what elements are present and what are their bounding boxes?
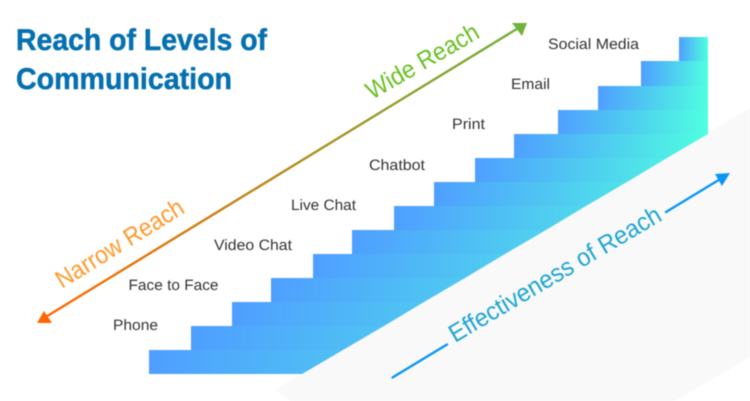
title	[16, 24, 268, 96]
step labels: Chatbot	[369, 157, 426, 174]
step labels: Social Media	[548, 36, 640, 53]
icon: green arrowhead	[512, 23, 527, 36]
label: wide reach: Wide Reach	[361, 18, 484, 105]
effectiveness arrow	[392, 173, 730, 378]
label: narrow reach: Narrow Reach	[50, 193, 189, 294]
reach arrow	[44, 23, 527, 318]
title: Communication	[16, 63, 232, 96]
grey diagonal band	[275, 108, 750, 401]
step labels: Print	[452, 116, 486, 133]
step labels: Face to Face	[128, 277, 218, 294]
step labels: Phone	[113, 317, 158, 334]
title: Reach of Levels of	[16, 24, 268, 57]
step labels: Live Chat	[291, 197, 357, 214]
step labels: Email	[511, 76, 550, 93]
staircase	[149, 37, 708, 374]
icon: blue arrowhead	[715, 173, 730, 186]
icon: orange arrowhead	[37, 311, 52, 323]
label: effectiveness of reach: Effectiveness of Reach	[444, 201, 666, 348]
step labels	[113, 36, 640, 334]
step labels: Video Chat	[214, 237, 293, 254]
